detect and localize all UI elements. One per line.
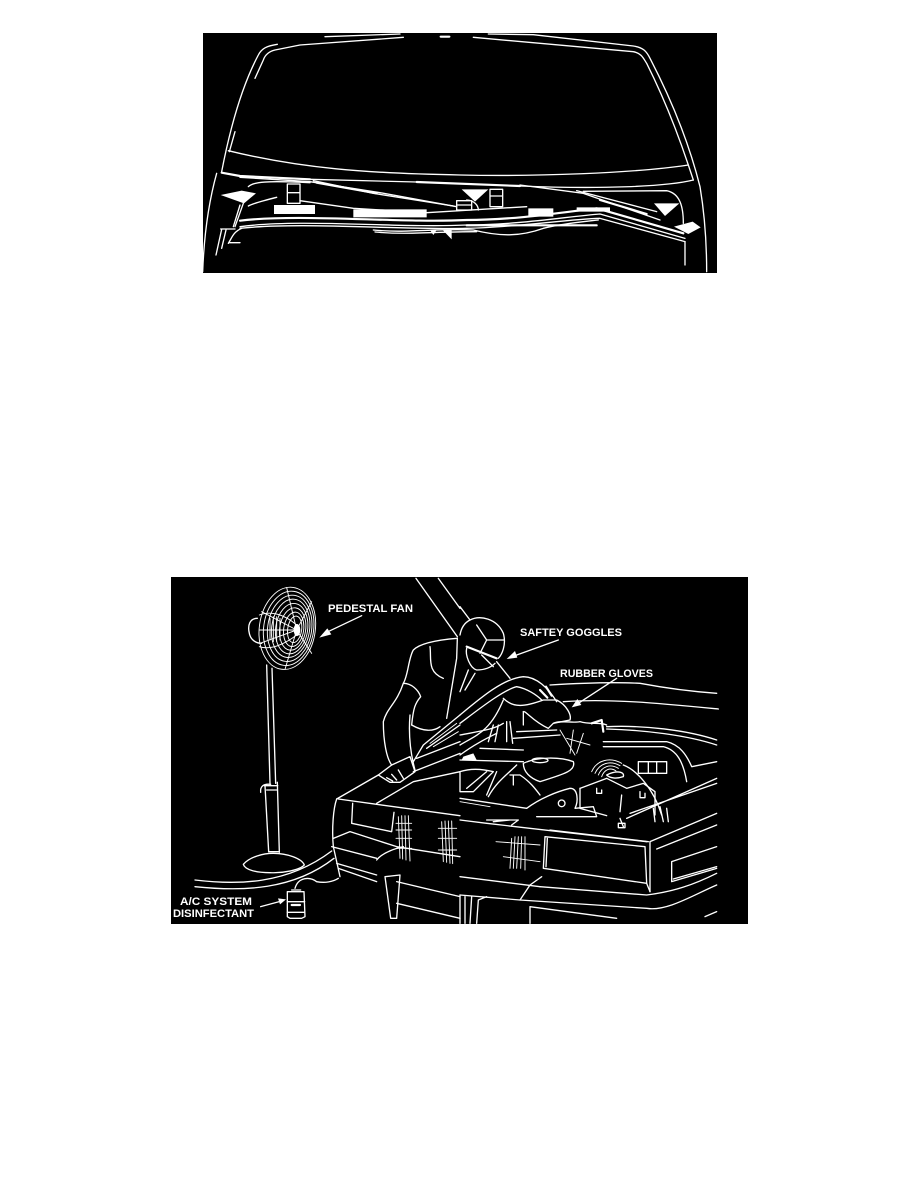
engine bay	[460, 722, 717, 828]
car front left	[332, 772, 460, 918]
label: saftey goggles: SAFTEY GOGGLES	[520, 627, 622, 639]
cowl panel and wipers	[216, 173, 693, 265]
label: pedestal fan: PEDESTAL FAN	[328, 603, 413, 615]
icon: pedestal fan	[243, 584, 321, 873]
label: rubber gloves: RUBBER GLOVES	[560, 668, 653, 680]
arrow: rubber gloves	[572, 678, 617, 707]
technician body	[378, 578, 460, 782]
label: A/C system disinfectant: DISINFECTANT	[173, 908, 254, 920]
hose nozzle and glove	[460, 677, 607, 745]
arrows marking water drains	[221, 189, 701, 239]
shop vacuum hose	[413, 715, 460, 772]
arrow: disinfectant	[261, 898, 286, 907]
label: A/C system disinfectant: A/C SYSTEM	[180, 896, 252, 908]
arrow: safety goggles	[507, 640, 558, 659]
icon: disinfectant bottle	[287, 890, 305, 918]
car front right	[460, 813, 717, 923]
floor hoses and cord	[195, 851, 338, 889]
panel: windshield and cowl drawing	[203, 33, 717, 273]
raised hood	[550, 683, 718, 782]
panel: technician applying disinfectant	[171, 577, 748, 924]
technician head and goggles	[460, 607, 510, 692]
windshield outline	[203, 34, 707, 272]
arrow: pedestal fan	[319, 616, 362, 638]
